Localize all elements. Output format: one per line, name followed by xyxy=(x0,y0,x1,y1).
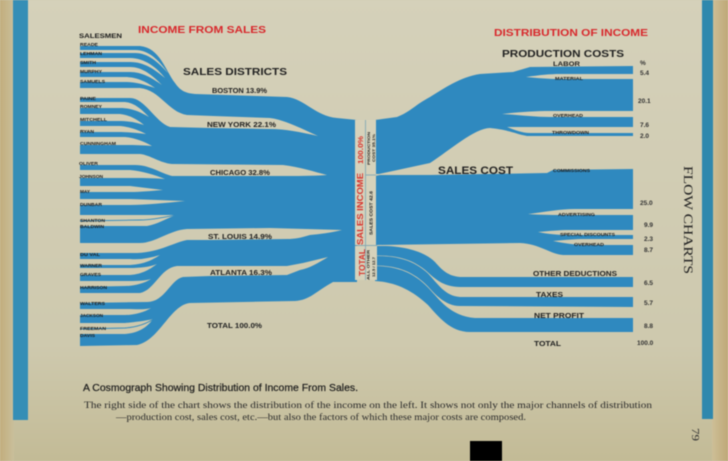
salesmen names: CUNNINGHAM xyxy=(80,141,116,146)
flow: production costs xyxy=(375,66,633,174)
percentage column: 5.4 xyxy=(640,70,649,77)
vertical red label: SALES INCOME xyxy=(355,173,365,245)
distribution item labels: ADVERTISING xyxy=(558,212,595,217)
all other label: ALL OTHER xyxy=(366,249,370,280)
percentage column: 8.8 xyxy=(644,323,653,330)
black scan block xyxy=(470,441,502,461)
caption body: —production cost, sales cost, etc.—but also the factors of which these major costs are composed. xyxy=(115,412,526,422)
distribution item labels: OTHER DEDUCTIONS xyxy=(533,271,617,278)
heading: income from sales: INCOME FROM SALES xyxy=(138,24,266,36)
salesmen names: DAVIS xyxy=(80,333,95,338)
sales district labels xyxy=(207,88,277,330)
salesmen names: SHANTON xyxy=(80,218,106,223)
salesmen names: MURPHY xyxy=(80,69,102,74)
salesmen names: BALDWIN xyxy=(80,224,105,229)
caption body xyxy=(84,400,653,422)
percentage column: 8.7 xyxy=(644,247,653,254)
percentage column: 100.0 xyxy=(637,340,654,347)
salesmen names: ROMNEY xyxy=(80,104,102,109)
percentage column xyxy=(637,60,654,347)
sales district labels: ST. LOUIS 14.9% xyxy=(208,234,273,241)
salesmen names: WARNER xyxy=(80,263,103,268)
percentage column: % xyxy=(640,60,646,67)
centre label column xyxy=(355,120,377,280)
salesmen names: OLIVER xyxy=(79,161,99,166)
heading: sales districts: SALES DISTRICTS xyxy=(183,66,287,78)
salesmen names: JACKSON xyxy=(80,313,104,318)
salesmen names: JOHNSON xyxy=(79,174,104,179)
salesmen names: DU VAL xyxy=(80,252,100,257)
percentage column: 7.6 xyxy=(640,122,649,129)
flow: other deductions xyxy=(375,246,633,287)
sales district labels: TOTAL 100.0% xyxy=(207,323,263,330)
sales district labels: CHICAGO 32.8% xyxy=(210,170,271,177)
distribution item labels: NET PROFIT xyxy=(534,313,585,320)
salesmen names: RYAN xyxy=(80,129,95,134)
percentage column: 5.7 xyxy=(644,300,653,307)
sales district labels: BOSTON 13.9% xyxy=(212,88,268,95)
flow: sales cost xyxy=(375,169,633,255)
page number: 79 xyxy=(689,428,701,442)
vertical red label: 100.0% xyxy=(356,136,365,164)
salesmen names: MAY xyxy=(80,189,90,194)
percentage column: 2.3 xyxy=(644,236,653,243)
distribution item labels: TAXES xyxy=(536,292,563,299)
heading: production costs: PRODUCTION COSTS xyxy=(502,48,624,60)
percentage column: 20.1 xyxy=(638,98,651,105)
percentage column: 9.9 xyxy=(644,222,653,229)
left blue page strip xyxy=(13,0,28,420)
right blue page strip xyxy=(702,0,713,419)
left flow: salesmen into sales districts xyxy=(80,46,357,346)
distribution item labels: MATERIAL xyxy=(555,76,583,81)
distribution item labels: OVERHEAD xyxy=(553,113,584,118)
salesmen names: SMITH xyxy=(80,60,97,65)
production cost label: PRODUCTION xyxy=(367,132,371,165)
distribution item labels: THROWDOWN xyxy=(552,130,590,135)
side title: flow charts: FLOW CHARTS xyxy=(681,166,696,274)
sales cost label: SALES COST 42.6 xyxy=(368,190,374,235)
salesmen names: DUNBAR xyxy=(80,202,103,207)
sales district labels: NEW YORK 22.1% xyxy=(207,122,277,129)
salesmen names xyxy=(79,42,116,338)
salesmen names: READE xyxy=(80,42,98,47)
salesmen names: HARRISON xyxy=(80,285,108,290)
heading: sales cost: SALES COST xyxy=(438,165,513,177)
distribution item labels: COMMISSIONS xyxy=(553,168,590,173)
all other value: 12.5 / 12.7 xyxy=(372,257,376,277)
salesmen names: FREEMAN xyxy=(80,326,107,331)
caption title: A Cosmograph Showing Distribution of Income From Sales. xyxy=(83,383,358,394)
salesmen names: MITCHELL xyxy=(80,117,107,122)
distribution item labels xyxy=(533,62,617,348)
heading: salesmen: SALESMEN xyxy=(79,33,122,40)
distribution item labels: OVERHEAD xyxy=(574,242,605,247)
salesmen names: PAINE xyxy=(80,96,96,101)
flow: net profit xyxy=(375,266,633,332)
distribution item labels: LABOR xyxy=(553,62,581,68)
sales district labels: ATLANTA 16.3% xyxy=(210,270,273,277)
production cost value: COST 35.1% xyxy=(372,133,376,162)
vertical red label: TOTAL xyxy=(358,249,367,276)
percentage column: 25.0 xyxy=(640,200,653,207)
percentage column: 2.0 xyxy=(640,133,649,140)
heading: distribution of income: DISTRIBUTION OF INCOME xyxy=(494,27,648,39)
salesmen names: WALTERS xyxy=(80,301,105,306)
percentage column: 6.5 xyxy=(644,280,653,287)
salesmen names: GRAVES xyxy=(80,272,101,277)
salesmen names: LEHMAN xyxy=(80,51,103,56)
right flow: production and sales costs xyxy=(375,66,633,255)
caption body: The right side of the chart shows the distribution of the income on the left. It shows not only the major channels of distribution xyxy=(84,400,653,410)
distribution item labels: TOTAL xyxy=(534,341,562,348)
flow: taxes xyxy=(375,256,633,307)
salesmen names: SAMUELS xyxy=(80,79,105,84)
distribution item labels: SPECIAL DISCOUNTS xyxy=(560,232,615,237)
